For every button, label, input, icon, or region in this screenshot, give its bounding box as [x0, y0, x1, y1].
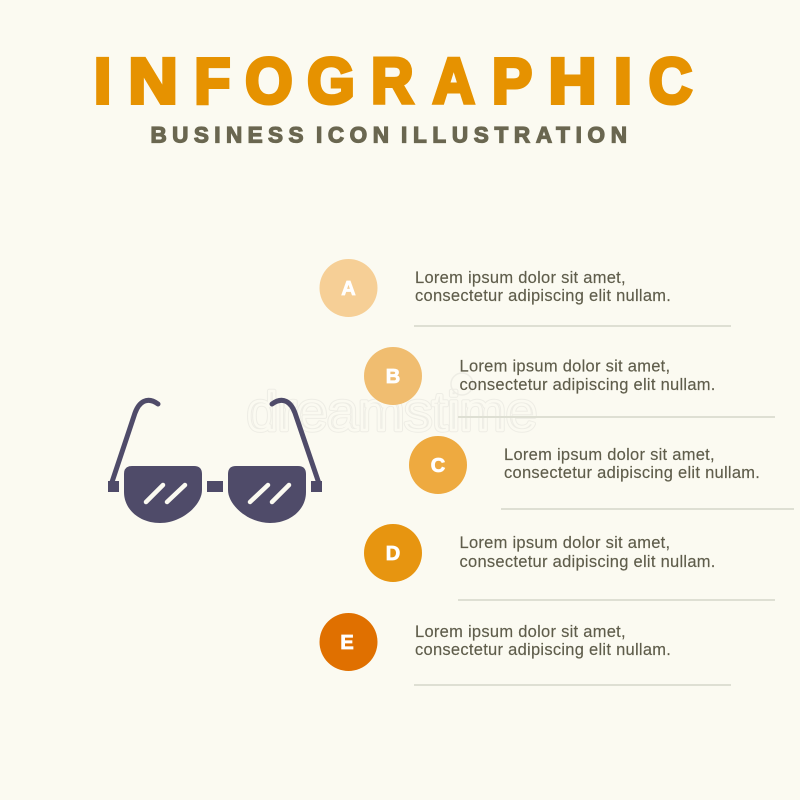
- letter C: C: [431, 455, 445, 477]
- letter E: E: [340, 632, 354, 654]
- title: F: [194, 46, 230, 118]
- lens glints: [146, 485, 289, 502]
- text B: consectetur adipiscing elit nullam.: [460, 376, 716, 394]
- title: G: [307, 46, 355, 117]
- left lens: [124, 466, 202, 523]
- text A: consectetur adipiscing elit nullam.: [415, 287, 671, 305]
- text B: Lorem ipsum dolor sit amet,: [460, 358, 670, 376]
- step B: [364, 347, 775, 418]
- title: O: [245, 46, 293, 117]
- watermark: dreamstime: [247, 382, 537, 442]
- title: I: [94, 46, 111, 117]
- bridge: [207, 481, 223, 492]
- title: H: [548, 45, 597, 117]
- right temple arm: [272, 400, 318, 482]
- right lens: [228, 466, 306, 523]
- subtitle: ILLUSTRATION: [401, 122, 627, 148]
- right hinge: [311, 481, 322, 492]
- letter B: B: [386, 366, 400, 388]
- step C: [409, 436, 794, 510]
- title: N: [128, 46, 178, 117]
- text C: Lorem ipsum dolor sit amet,: [504, 446, 715, 464]
- text D: consectetur adipiscing elit nullam.: [460, 553, 716, 571]
- badge C: [409, 436, 467, 494]
- badge B: [364, 347, 422, 405]
- title: [94, 45, 692, 118]
- letter A: A: [341, 278, 356, 300]
- badge A: [320, 259, 378, 317]
- subtitle: [150, 122, 627, 148]
- title: R: [371, 45, 413, 117]
- text A: Lorem ipsum dolor sit amet,: [415, 269, 626, 287]
- left temple arm: [112, 400, 158, 482]
- text E: consectetur adipiscing elit nullam.: [415, 641, 671, 659]
- step A: [320, 259, 731, 327]
- watermark: dreamstime: [247, 382, 537, 442]
- title: C: [649, 46, 692, 117]
- title: I: [614, 45, 632, 117]
- letter D: D: [386, 543, 400, 565]
- title: A: [433, 45, 475, 117]
- step E: [320, 613, 731, 686]
- subtitle: ICON: [316, 122, 389, 148]
- text E: Lorem ipsum dolor sit amet,: [415, 623, 626, 641]
- left hinge: [108, 481, 119, 492]
- step D: [364, 524, 775, 601]
- title: P: [492, 46, 532, 117]
- text C: consectetur adipiscing elit nullam.: [504, 464, 760, 482]
- icon: sunglasses: [108, 400, 322, 523]
- badge E: [320, 613, 378, 671]
- subtitle: BUSINESS: [150, 122, 304, 148]
- badge D: [364, 524, 422, 582]
- text D: Lorem ipsum dolor sit amet,: [460, 534, 670, 552]
